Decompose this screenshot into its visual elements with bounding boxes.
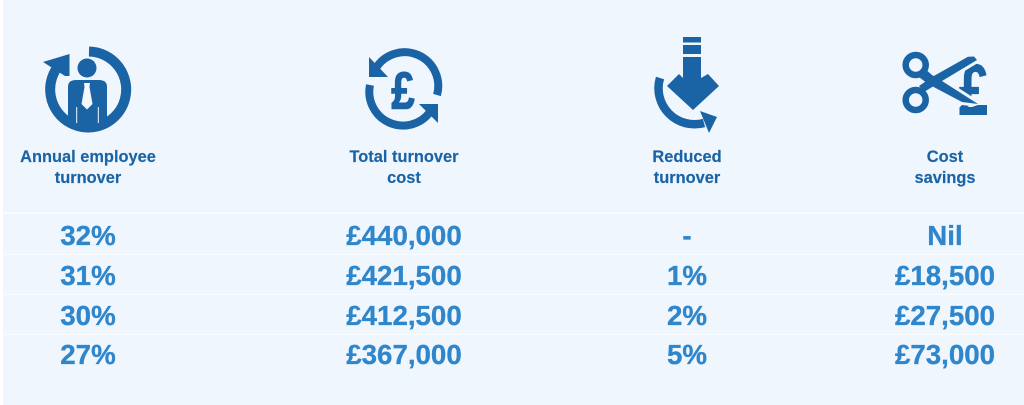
table row 4: 5% bbox=[667, 339, 707, 370]
table row 1: 32% bbox=[60, 220, 116, 251]
table row 3: £412,500 bbox=[346, 300, 462, 331]
icon: employee with circular arrow bbox=[43, 52, 126, 127]
icon: scissors cutting pound: £ bbox=[959, 51, 989, 131]
table row 4: £73,000 bbox=[895, 339, 995, 370]
table row 3 bbox=[60, 300, 995, 331]
heading: reduced turnover: turnover bbox=[654, 169, 720, 187]
icon: pound with circular arrows: £ bbox=[391, 61, 415, 120]
table row 2: 31% bbox=[60, 260, 116, 291]
heading: cost savings: Cost bbox=[927, 148, 963, 166]
icon: down arrow with curved arrow bbox=[659, 37, 719, 133]
table row 4 bbox=[60, 339, 995, 370]
heading: total turnover cost: Total turnover bbox=[350, 148, 458, 166]
table row 2: 1% bbox=[667, 260, 707, 291]
heading: annual employee turnover: turnover bbox=[55, 169, 121, 187]
heading: reduced turnover: Reduced bbox=[652, 148, 722, 166]
table row 1 bbox=[60, 220, 963, 251]
heading: annual employee turnover: Annual employee bbox=[20, 148, 156, 166]
table row 1: £440,000 bbox=[346, 220, 462, 251]
heading: reduced turnover bbox=[652, 148, 722, 187]
table row 3: £27,500 bbox=[895, 300, 995, 331]
table row 1: - bbox=[682, 220, 692, 251]
heading: total turnover cost: cost bbox=[387, 169, 421, 187]
table row 2: £18,500 bbox=[895, 260, 995, 291]
icon: scissors cutting pound bbox=[906, 51, 992, 131]
heading: cost savings bbox=[914, 148, 976, 187]
table row 2 bbox=[60, 260, 995, 291]
heading: cost savings: savings bbox=[914, 169, 976, 187]
table row 2: £421,500 bbox=[346, 260, 462, 291]
icon: pound with circular arrows bbox=[369, 52, 438, 126]
heading: annual employee turnover bbox=[20, 148, 156, 187]
table row 4: 27% bbox=[60, 339, 116, 370]
table row 1: Nil bbox=[927, 220, 963, 251]
table row 3: 2% bbox=[667, 300, 707, 331]
table row 4: £367,000 bbox=[346, 339, 462, 370]
table row 3: 30% bbox=[60, 300, 116, 331]
heading: total turnover cost bbox=[350, 148, 458, 187]
